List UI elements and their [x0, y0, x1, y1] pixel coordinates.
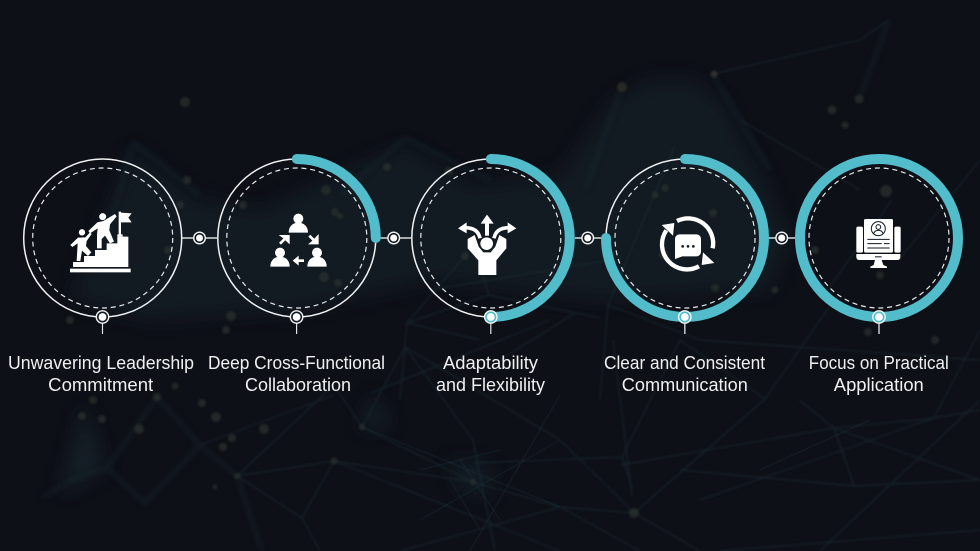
outer ring — [606, 159, 764, 317]
connector: step 1 to step 2 — [182, 232, 217, 244]
label: Collaboration — [245, 375, 351, 395]
label: Commitment — [48, 375, 153, 395]
label: Deep Cross-Functional — [208, 353, 385, 373]
inner dashed ring — [615, 168, 755, 308]
label: and Flexibility — [436, 375, 545, 395]
inner dashed ring — [33, 168, 173, 308]
icon: person with three direction arrows — [458, 215, 516, 275]
connector: step 2 to step 3 — [376, 232, 411, 244]
progress arc: half — [491, 159, 570, 317]
step 1: Unwavering Leadership Commitment — [8, 159, 194, 395]
label — [604, 353, 765, 395]
bottom node — [679, 311, 691, 334]
label: Application — [834, 375, 924, 395]
icon: people climbing stairs to a flag — [70, 212, 132, 272]
progress arc: three quarters — [606, 159, 764, 317]
label — [208, 353, 385, 395]
icon: speech bubble inside cycle arrows — [662, 218, 714, 269]
step 3: Adaptability and Flexibility — [412, 159, 570, 395]
connector: step 4 to step 5 — [769, 232, 795, 244]
progress ring: full — [800, 159, 958, 317]
outer ring — [24, 159, 182, 317]
label — [809, 353, 949, 395]
label: Unwavering Leadership — [8, 353, 194, 373]
bottom node — [96, 311, 109, 334]
connector: step 3 to step 4 — [575, 232, 601, 244]
outer ring — [218, 159, 376, 317]
label: Clear and Consistent — [604, 353, 765, 373]
bottom node — [485, 311, 497, 334]
inner dashed ring — [227, 168, 367, 308]
progress arc: quarter — [297, 159, 376, 238]
outer ring — [412, 159, 570, 317]
inner dashed ring — [809, 168, 949, 308]
label: Adaptability — [443, 353, 538, 373]
label — [8, 353, 194, 395]
label: Focus on Practical — [809, 353, 949, 373]
icon: monitor with profile document — [856, 219, 901, 268]
label — [436, 353, 545, 395]
step 2: Deep Cross-Functional Collaboration — [208, 159, 385, 395]
bottom node — [290, 311, 303, 334]
step 4: Clear and Consistent Communication — [604, 159, 765, 395]
label: Communication — [622, 375, 748, 395]
step 5: Focus on Practical Application — [800, 159, 958, 395]
icon: three people with cycle arrows — [270, 214, 327, 267]
bottom node — [873, 311, 885, 334]
inner dashed ring — [421, 168, 561, 308]
